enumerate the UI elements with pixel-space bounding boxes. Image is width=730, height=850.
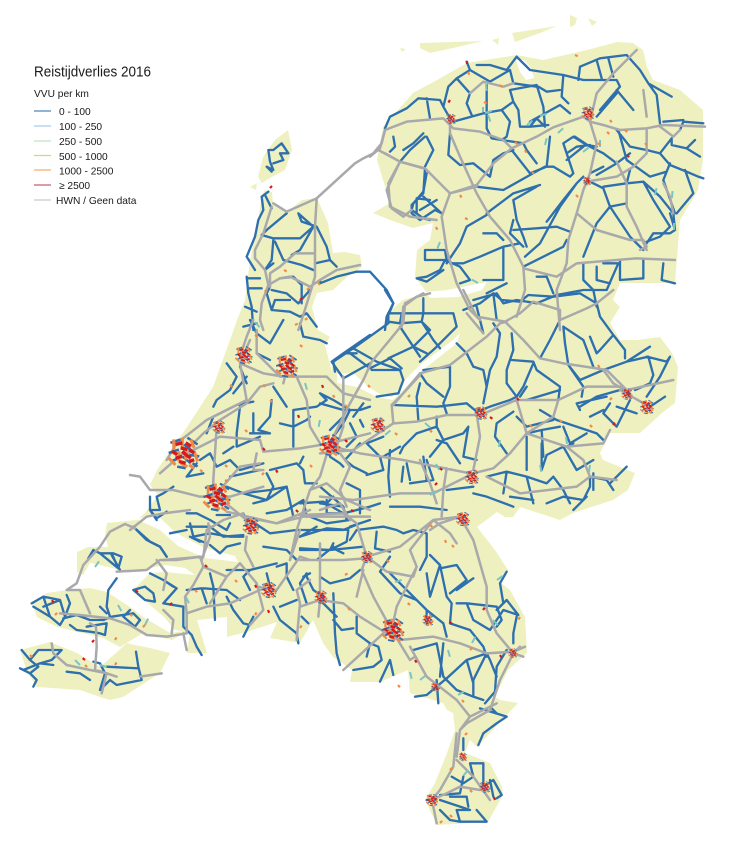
urban hot spots — [169, 107, 654, 806]
hot spot: Apeldoorn — [475, 407, 487, 419]
legend item: HWN / Geen data: HWN / Geen data — [56, 196, 137, 207]
legend item: 500 - 1000: 500 - 1000 — [59, 152, 108, 163]
hot spot: Dordrecht — [243, 518, 259, 534]
main roads: Randstad — [130, 320, 370, 560]
land: Zeeuws-Vlaanderen — [20, 642, 170, 700]
roads: Randstad — [133, 320, 370, 560]
hot spot: Sittard — [459, 753, 467, 761]
land: Zuid-Beveland and Walcheren — [32, 588, 190, 647]
hot spot: Heerlen — [480, 782, 490, 792]
water: Randmeren — [337, 333, 460, 400]
legend item: 100 - 250: 100 - 250 — [59, 122, 102, 133]
legend item: 1000 - 2500: 1000 - 2500 — [59, 166, 114, 178]
hot spot: Helmond — [423, 615, 433, 625]
congestion: red road segments — [52, 61, 630, 802]
roads: north-east — [385, 55, 703, 307]
water: Ketelmeer — [425, 282, 487, 298]
hot spot: Den Haag — [169, 438, 199, 468]
hot spot: Assen — [583, 177, 591, 185]
hot spot: Roermond — [431, 683, 439, 691]
hot spot: Den Bosch — [361, 551, 373, 563]
hot spot: Amersfoort — [371, 418, 385, 432]
hot spot: Rotterdam — [204, 484, 230, 510]
legend subtitle: VVU per km — [34, 89, 89, 100]
main roads: Brabant and Limburg — [300, 513, 525, 823]
legend item: 1000 - 2500 — [34, 166, 114, 178]
hot spot: Haarlem — [235, 346, 253, 364]
hot spot: Nijmegen — [456, 512, 470, 526]
hot spot: Groningen — [582, 107, 594, 119]
main roads: centre and east — [320, 290, 673, 520]
land: mainland — [77, 42, 703, 825]
legend item: 100 - 250 — [34, 122, 102, 133]
congestion: orange road segments — [30, 55, 648, 823]
legend item: 250 - 500: 250 - 500 — [59, 137, 102, 148]
hot spot: Enschede — [640, 400, 654, 414]
hot spot: Tilburg — [315, 591, 327, 603]
legend item: 2500 and above — [34, 181, 90, 192]
legend item: 500 - 1000 — [34, 152, 108, 163]
hot spot: Amsterdam — [276, 355, 298, 377]
hot spot: Arnhem — [465, 470, 479, 484]
hot spot: Utrecht — [320, 435, 340, 455]
legend — [34, 64, 151, 207]
main roads: north-east — [370, 50, 705, 330]
roads: south-west — [20, 510, 310, 690]
legend title: Reistijdverlies 2016 — [34, 64, 151, 80]
water: Haringvliet — [136, 515, 238, 562]
hot spot: Hengelo — [622, 389, 632, 399]
main roads: south-west — [52, 510, 310, 693]
roads: Brabant and Limburg — [300, 502, 518, 822]
hot spot: Leeuwarden — [446, 114, 456, 124]
legend item: 0 - 100: 0 - 100 — [59, 107, 91, 118]
hot spot: Leiden — [213, 421, 225, 433]
roads: centre and east — [320, 290, 670, 520]
roads: Noord-Holland — [243, 133, 430, 330]
legend item: 250 - 500 — [34, 137, 102, 148]
water: inner waterways — [136, 60, 534, 562]
main roads: Noord-Holland — [255, 130, 430, 330]
congestion: light-blue and green road segments — [75, 84, 674, 780]
land: Wadden islands — [250, 15, 597, 190]
hot spot: Eindhoven — [382, 619, 404, 641]
land: Texel — [258, 130, 292, 183]
hot spot: Maastricht — [426, 794, 438, 806]
hot spot: Breda — [261, 582, 277, 598]
water: Lauwersmeer — [516, 60, 534, 80]
legend item: 2500 and above: ≥ 2500 — [59, 181, 90, 192]
hot spot: Venlo — [508, 648, 518, 658]
legend item: 0 - 100 — [34, 107, 91, 118]
